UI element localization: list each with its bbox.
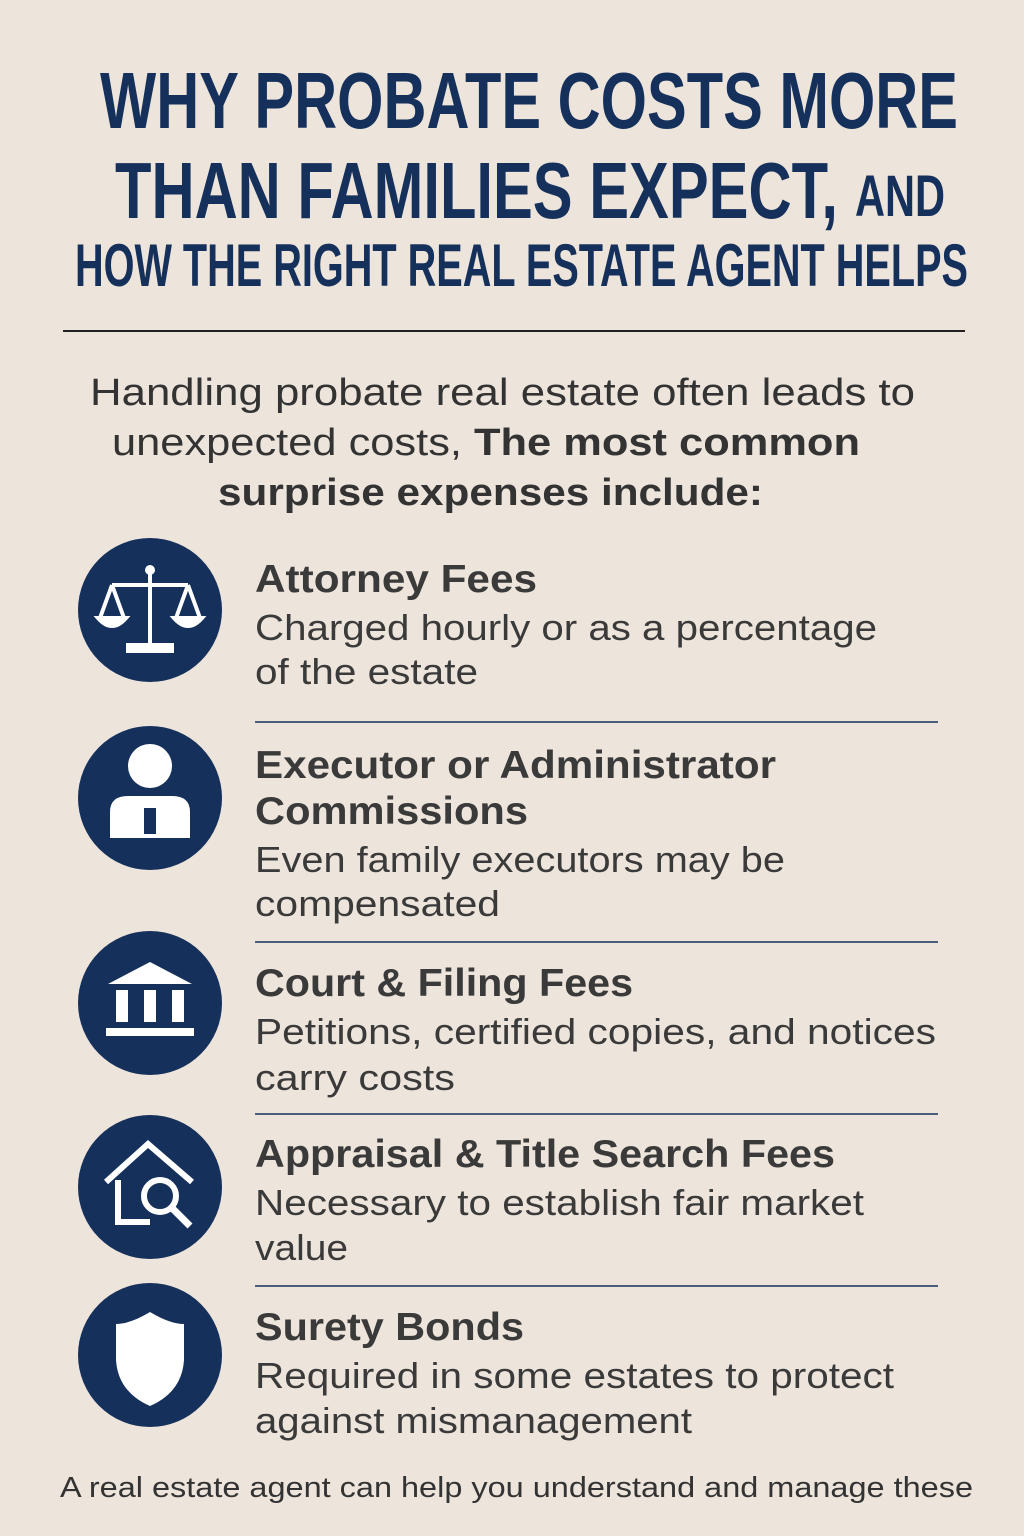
item: executor: Executor or Administrator	[255, 744, 776, 787]
item: surety bonds	[78, 1283, 894, 1441]
item: court: Court & Filing Fees	[255, 962, 633, 1005]
item: surety bonds: against mismanagement	[255, 1400, 692, 1441]
title	[75, 56, 968, 299]
item: surety bonds: Required in some estates to protect	[255, 1355, 894, 1396]
intro text: surprise expenses include:	[218, 472, 763, 514]
item: appraisal: Appraisal & Title Search Fees	[255, 1133, 835, 1176]
footer: A real estate agent can help you understand and manage these	[60, 1472, 973, 1504]
item: executor: Even family executors may be	[255, 839, 785, 880]
item: appraisal: Necessary to establish fair market	[255, 1182, 864, 1223]
title: AND	[855, 164, 945, 229]
item: court: carry costs	[255, 1057, 455, 1098]
item: appraisal: value	[255, 1227, 348, 1268]
item: attorney fees: Attorney Fees	[255, 558, 537, 601]
icon: shield	[78, 1283, 222, 1427]
item: court	[78, 931, 936, 1098]
intro text	[90, 372, 915, 514]
item: surety bonds: Surety Bonds	[255, 1306, 524, 1349]
intro text: unexpected costs, The most common	[112, 422, 860, 464]
item: court: Petitions, certified copies, and notices	[255, 1011, 936, 1052]
item: executor	[78, 726, 785, 924]
icon: scales	[78, 538, 222, 682]
item: attorney fees: of the estate	[255, 651, 478, 692]
item: appraisal	[78, 1115, 864, 1268]
item: attorney fees	[78, 538, 877, 692]
icon: house search	[78, 1115, 222, 1259]
item: executor: compensated	[255, 883, 500, 924]
item: attorney fees: Charged hourly or as a percentage	[255, 607, 877, 648]
icon: courthouse	[78, 931, 222, 1075]
item: executor: Commissions	[255, 790, 528, 833]
intro text: Handling probate real estate often leads to	[90, 372, 915, 414]
icon: person	[78, 726, 222, 870]
